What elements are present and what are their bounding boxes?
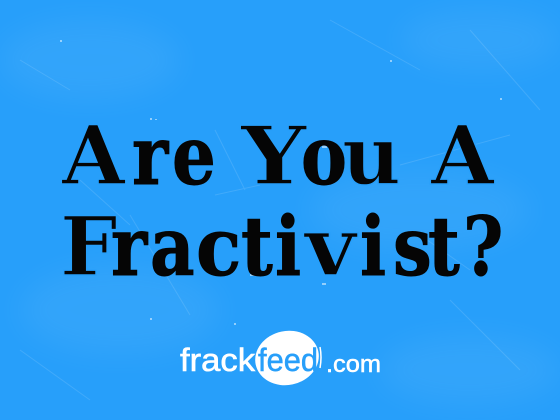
- logo oval: [250, 325, 324, 391]
- title line 2: [60, 198, 503, 295]
- title line 1: A: [61, 109, 126, 204]
- logo text: frack: frack: [180, 342, 256, 378]
- title line 2: ?: [463, 198, 503, 294]
- title line 2: a: [150, 198, 195, 294]
- title: [60, 107, 503, 295]
- logo text: .com: .com: [326, 351, 381, 378]
- title line 2: v: [303, 199, 359, 294]
- title line 1: r: [132, 107, 170, 203]
- title line 2: t: [241, 198, 273, 294]
- logo: frackfeed.com: [180, 325, 381, 391]
- title line 2: t: [428, 198, 460, 294]
- title line 2: i: [360, 198, 386, 294]
- title line 2: c: [196, 200, 241, 295]
- logo accent: d stem: [320, 347, 321, 368]
- title line 2: r: [111, 198, 149, 294]
- title line 1: Y: [240, 109, 308, 204]
- title line 2: F: [60, 200, 118, 295]
- title line 1: u: [342, 109, 401, 204]
- title line 2: i: [275, 198, 301, 294]
- title line 1: [61, 107, 495, 204]
- title line 2: s: [393, 198, 432, 294]
- title line 1: o: [301, 107, 347, 203]
- title line 1: A: [430, 109, 495, 204]
- logo text: feed: feed: [258, 342, 318, 378]
- title line 1: e: [172, 107, 216, 203]
